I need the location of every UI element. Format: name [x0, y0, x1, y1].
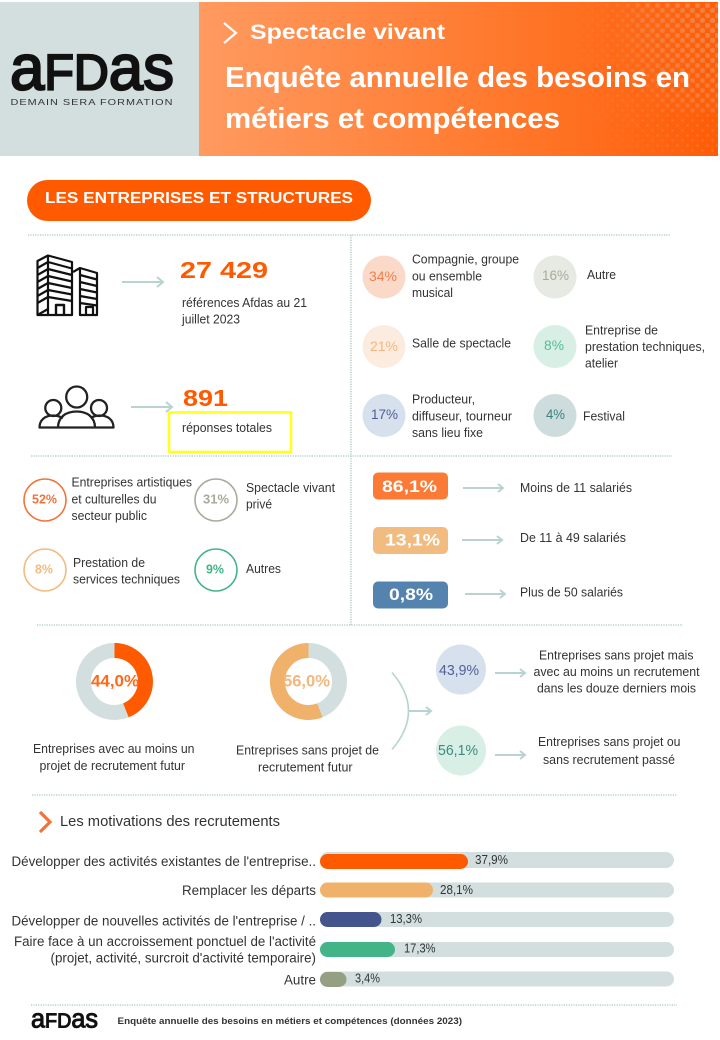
panel: company size [373, 472, 632, 608]
donut chart: 44% [84, 650, 146, 712]
bar: remplacer les départs: 28,1% [440, 883, 473, 897]
stat: 56,1%: sans recrutement passé [543, 753, 675, 767]
stat: autres 9% [195, 549, 281, 591]
bar: nouvelles activités: 13,3% [390, 912, 422, 926]
stat: compagnie 34%: 34% [369, 268, 397, 284]
stat: autres 9%: Autres [246, 562, 281, 576]
row: plus de 50 salariés: Plus de 50 salariés [520, 586, 623, 600]
panel: key figures [38, 256, 307, 452]
stat: 56,1%: Entreprises sans projet ou [538, 735, 681, 749]
stat: prestation 8% [534, 323, 705, 371]
logo wordmark: aFDas [10, 32, 174, 104]
stat: autre 16%: Autre [587, 268, 616, 282]
stat: 43,9%: 43,9% [439, 663, 479, 679]
stat: 43,9% [436, 644, 700, 696]
stat: producteur 17% [362, 393, 512, 440]
stat: salle 21% [362, 325, 511, 368]
section heading pill: LES ENTREPRISES ET STRUCTURES [45, 190, 353, 207]
sub-heading: Les motivations des recrutements [60, 813, 280, 830]
row: moins de 11 salariés [373, 472, 632, 500]
stat: prestation 8%: prestation techniques, [585, 340, 705, 354]
figure: responses: 891 [183, 385, 228, 411]
stat: secteur public 52%: secteur public [72, 509, 147, 523]
stat: compagnie 34%: musical [412, 286, 453, 300]
stat: prestation 8%: Entreprise de [585, 323, 658, 337]
text: responses caption: réponses totales [182, 421, 272, 435]
section heading pill [27, 180, 371, 221]
bar: activités existantes: 37,9% [475, 853, 508, 867]
stat: compagnie 34%: ou ensemble [412, 269, 482, 283]
stat: prestation 8% [24, 549, 180, 591]
bar: accroissement ponctuel [14, 934, 674, 965]
stat: festival 4%: 4% [546, 406, 565, 422]
bar: activités existantes: Développer des activités existantes de l'entreprise.. [12, 854, 316, 869]
icon: chevron [224, 23, 236, 43]
subtitle: Spectacle vivant [250, 20, 445, 44]
bar chart [12, 852, 674, 987]
text: references caption [181, 296, 307, 326]
donut chart: 44%: 44,0% [91, 672, 139, 690]
highlight box [169, 412, 291, 452]
caption: projet de recrutement futur [40, 759, 185, 773]
bar: nouvelles activités: Développer de nouvelles activités de l'entreprise / .. [12, 913, 316, 928]
bar: accroissement ponctuel: Faire face à un accroissement ponctuel de l'activité [14, 934, 316, 949]
caption: Entreprises avec au moins un [33, 742, 195, 756]
stat: compagnie 34% [362, 253, 519, 300]
title: métiers et compétences [225, 103, 560, 135]
bar: accroissement ponctuel: (projet, activité, surcroit d'activité temporaire) [50, 950, 316, 965]
donut chart: 56%: 56,0% [283, 672, 330, 690]
row: plus de 50 salariés: 0,8% [389, 586, 433, 604]
stat: compagnie 34%: Compagnie, groupe [412, 253, 519, 267]
stat: spectacle vivant privé 31%: 31% [203, 493, 229, 507]
stat: autres 9%: 9% [206, 562, 224, 576]
row: de 11 à 49 salariés: 13,1% [385, 532, 440, 550]
bar: remplacer les départs [182, 882, 674, 898]
header banner [0, 2, 718, 156]
stat: prestation 8%: 8% [544, 337, 564, 353]
stat: secteur public 52%: Entreprises artistiques [72, 476, 192, 490]
stat: 43,9%: Entreprises sans projet mais [539, 648, 694, 662]
stat: secteur public 52%: 52% [32, 493, 57, 507]
stat: autre 16%: 16% [542, 267, 569, 283]
figure: references: 27 429 [180, 257, 268, 283]
stat: prestation 8%: 8% [35, 562, 53, 576]
row: de 11 à 49 salariés [373, 527, 626, 554]
row: moins de 11 salariés: Moins de 11 salariés [520, 481, 632, 495]
stat: festival 4%: Festival [583, 409, 625, 423]
stat: prestation 8%: services techniques [73, 573, 180, 587]
stat: 56,1%: 56,1% [438, 743, 478, 759]
stat: salle 21%: 21% [370, 338, 398, 354]
bar: autre: 3,4% [355, 972, 380, 986]
footer [31, 1006, 462, 1034]
bar: remplacer les départs: Remplacer les départs [182, 883, 316, 898]
stat: producteur 17%: sans lieu fixe [412, 426, 483, 440]
panel: sectors [24, 476, 336, 591]
stat: producteur 17%: diffuseur, tourneur [412, 409, 512, 423]
stat: producteur 17%: 17% [371, 406, 398, 422]
caption: Entreprises sans projet de [236, 743, 379, 757]
bar: nouvelles activités [12, 912, 674, 928]
bar: autre: Autre [284, 972, 316, 987]
arrow [131, 402, 172, 412]
footer caption: Enquête annuelle des besoins en métiers et compétences (données 2023) [118, 1016, 462, 1026]
title panel [199, 2, 718, 156]
title [225, 62, 690, 135]
stat: spectacle vivant privé 31%: Spectacle vivant [246, 481, 336, 495]
stat: spectacle vivant privé 31%: privé [246, 498, 272, 512]
stat: secteur public 52%: et culturelles du [72, 492, 157, 506]
footer logo: aFDas [31, 1006, 98, 1034]
stat: 43,9%: dans les douze derniers mois [537, 682, 696, 696]
stat: 43,9%: avec au moins un recrutement [534, 665, 700, 679]
arrow [122, 277, 163, 287]
row: moins de 11 salariés: 86,1% [382, 478, 437, 496]
icon: buildings [38, 256, 97, 315]
text: references caption: références Afdas au 21 [182, 296, 307, 310]
stat: producteur 17%: Producteur, [412, 393, 475, 407]
bar: autre [284, 972, 674, 987]
stat: festival 4% [534, 394, 625, 437]
logo panel [0, 2, 199, 156]
title: Enquête annuelle des besoins en [225, 62, 690, 94]
caption [236, 743, 379, 775]
panel: recruitment motivations [12, 812, 674, 987]
donut chart: 56% [277, 650, 340, 712]
caption: recrutement futur [258, 761, 352, 775]
bar: activités existantes [12, 852, 674, 869]
bar: accroissement ponctuel: 17,3% [404, 942, 436, 956]
stat: spectacle vivant privé 31% [195, 479, 336, 521]
stat: prestation 8%: Prestation de [73, 556, 145, 570]
panel: structure types [362, 253, 705, 440]
row: de 11 à 49 salariés: De 11 à 49 salariés [520, 531, 626, 545]
icon: people [40, 386, 114, 428]
stat: autre 16% [534, 256, 616, 298]
caption [33, 742, 195, 773]
stat: salle 21%: Salle de spectacle [412, 337, 511, 351]
text: references caption: juillet 2023 [181, 312, 240, 326]
stat: secteur public 52% [24, 476, 192, 523]
bracket arrow [392, 672, 431, 750]
logo tagline: DEMAIN SERA FORMATION [10, 97, 174, 107]
stat: prestation 8%: atelier [585, 357, 618, 371]
row: plus de 50 salariés [373, 582, 623, 608]
panel: recruitment projects [33, 644, 700, 776]
stat: 56,1% [436, 726, 681, 776]
